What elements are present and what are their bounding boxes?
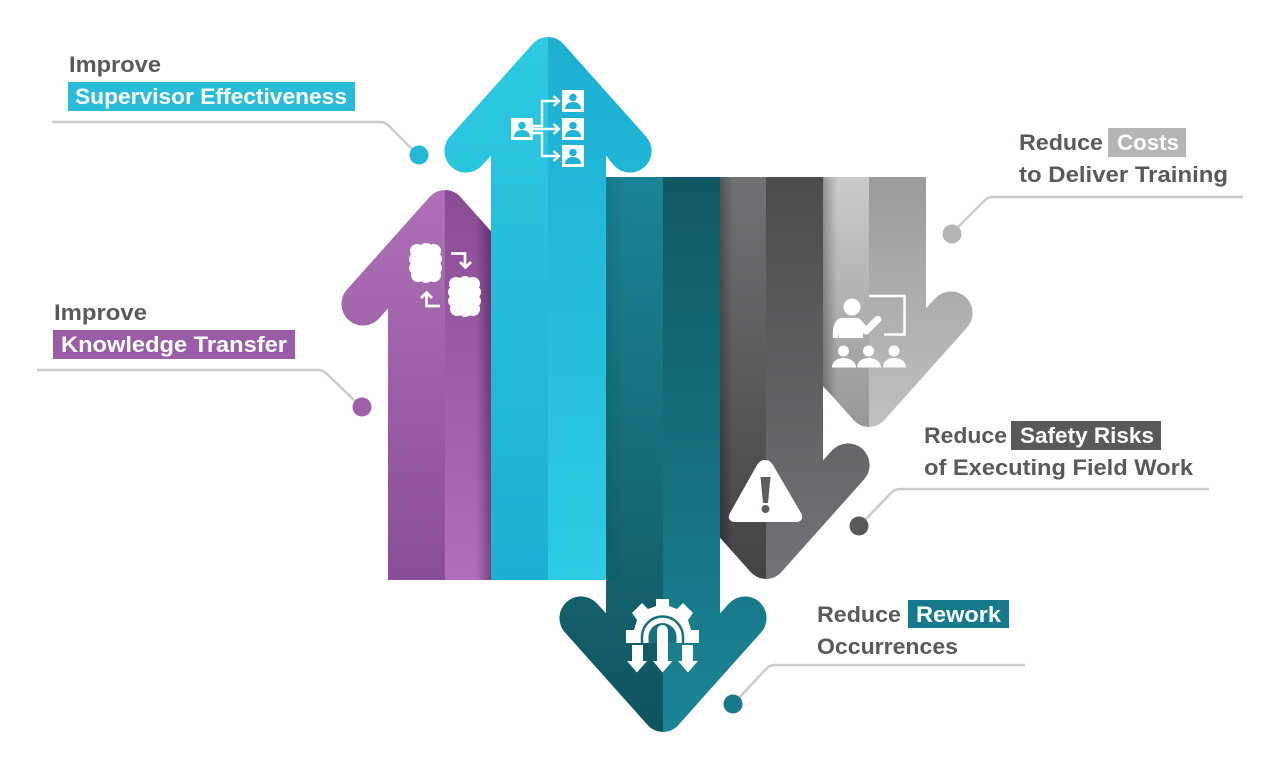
label: reduce costs: Costs — [1117, 130, 1179, 155]
shadow: on dark grey arrow — [720, 177, 733, 552]
arrow: light grey, reduce costs — [765, 177, 973, 427]
connector: safety risks — [850, 489, 1209, 536]
label: reduce safety risks — [924, 421, 1194, 480]
label: improve knowledge transfer: Knowledge Transfer — [61, 332, 287, 357]
label: reduce safety risks: of Executing Field Work — [924, 455, 1194, 480]
shadow: on teal arrow — [606, 177, 626, 580]
label: improve knowledge transfer — [53, 300, 295, 359]
icon: org hierarchy — [511, 90, 584, 167]
label: reduce rework: Occurrences — [817, 634, 958, 659]
icon: trainer and audience — [832, 296, 906, 368]
icon: gear with rework arrows — [626, 599, 699, 672]
label: reduce rework: Rework — [916, 602, 1002, 627]
label: reduce rework: Reduce — [817, 602, 901, 627]
label: reduce costs: to Deliver Training — [1019, 162, 1228, 187]
label: improve supervisor effectiveness — [68, 52, 355, 111]
connector: supervisor effectiveness — [52, 122, 428, 164]
label: improve knowledge transfer: Improve — [54, 300, 147, 325]
connector: rework — [724, 665, 1025, 714]
connector: knowledge transfer — [37, 370, 372, 416]
shadow: on purple arrow — [476, 215, 491, 580]
label: reduce safety risks: Reduce — [924, 423, 1007, 448]
icon: knowledge transfer brains — [409, 243, 481, 317]
connector: costs — [942, 197, 1243, 244]
label: improve supervisor effectiveness: Improve — [69, 52, 161, 77]
label: reduce safety risks: Safety Risks — [1020, 423, 1154, 448]
arrow: cyan, improve supervisor effectiveness — [444, 37, 652, 580]
label: reduce rework — [817, 600, 1009, 659]
arrow: dark grey, reduce safety risks — [662, 177, 870, 579]
arrow: teal, reduce rework — [559, 177, 767, 732]
icon: warning triangle — [729, 460, 802, 522]
arrow: purple, improve knowledge transfer — [341, 190, 491, 580]
label: reduce costs: Reduce — [1019, 130, 1103, 155]
label: reduce costs — [1019, 128, 1228, 187]
label: improve supervisor effectiveness: Supervisor Effectiveness — [75, 84, 347, 109]
shadow: on light grey arrow — [823, 177, 837, 401]
